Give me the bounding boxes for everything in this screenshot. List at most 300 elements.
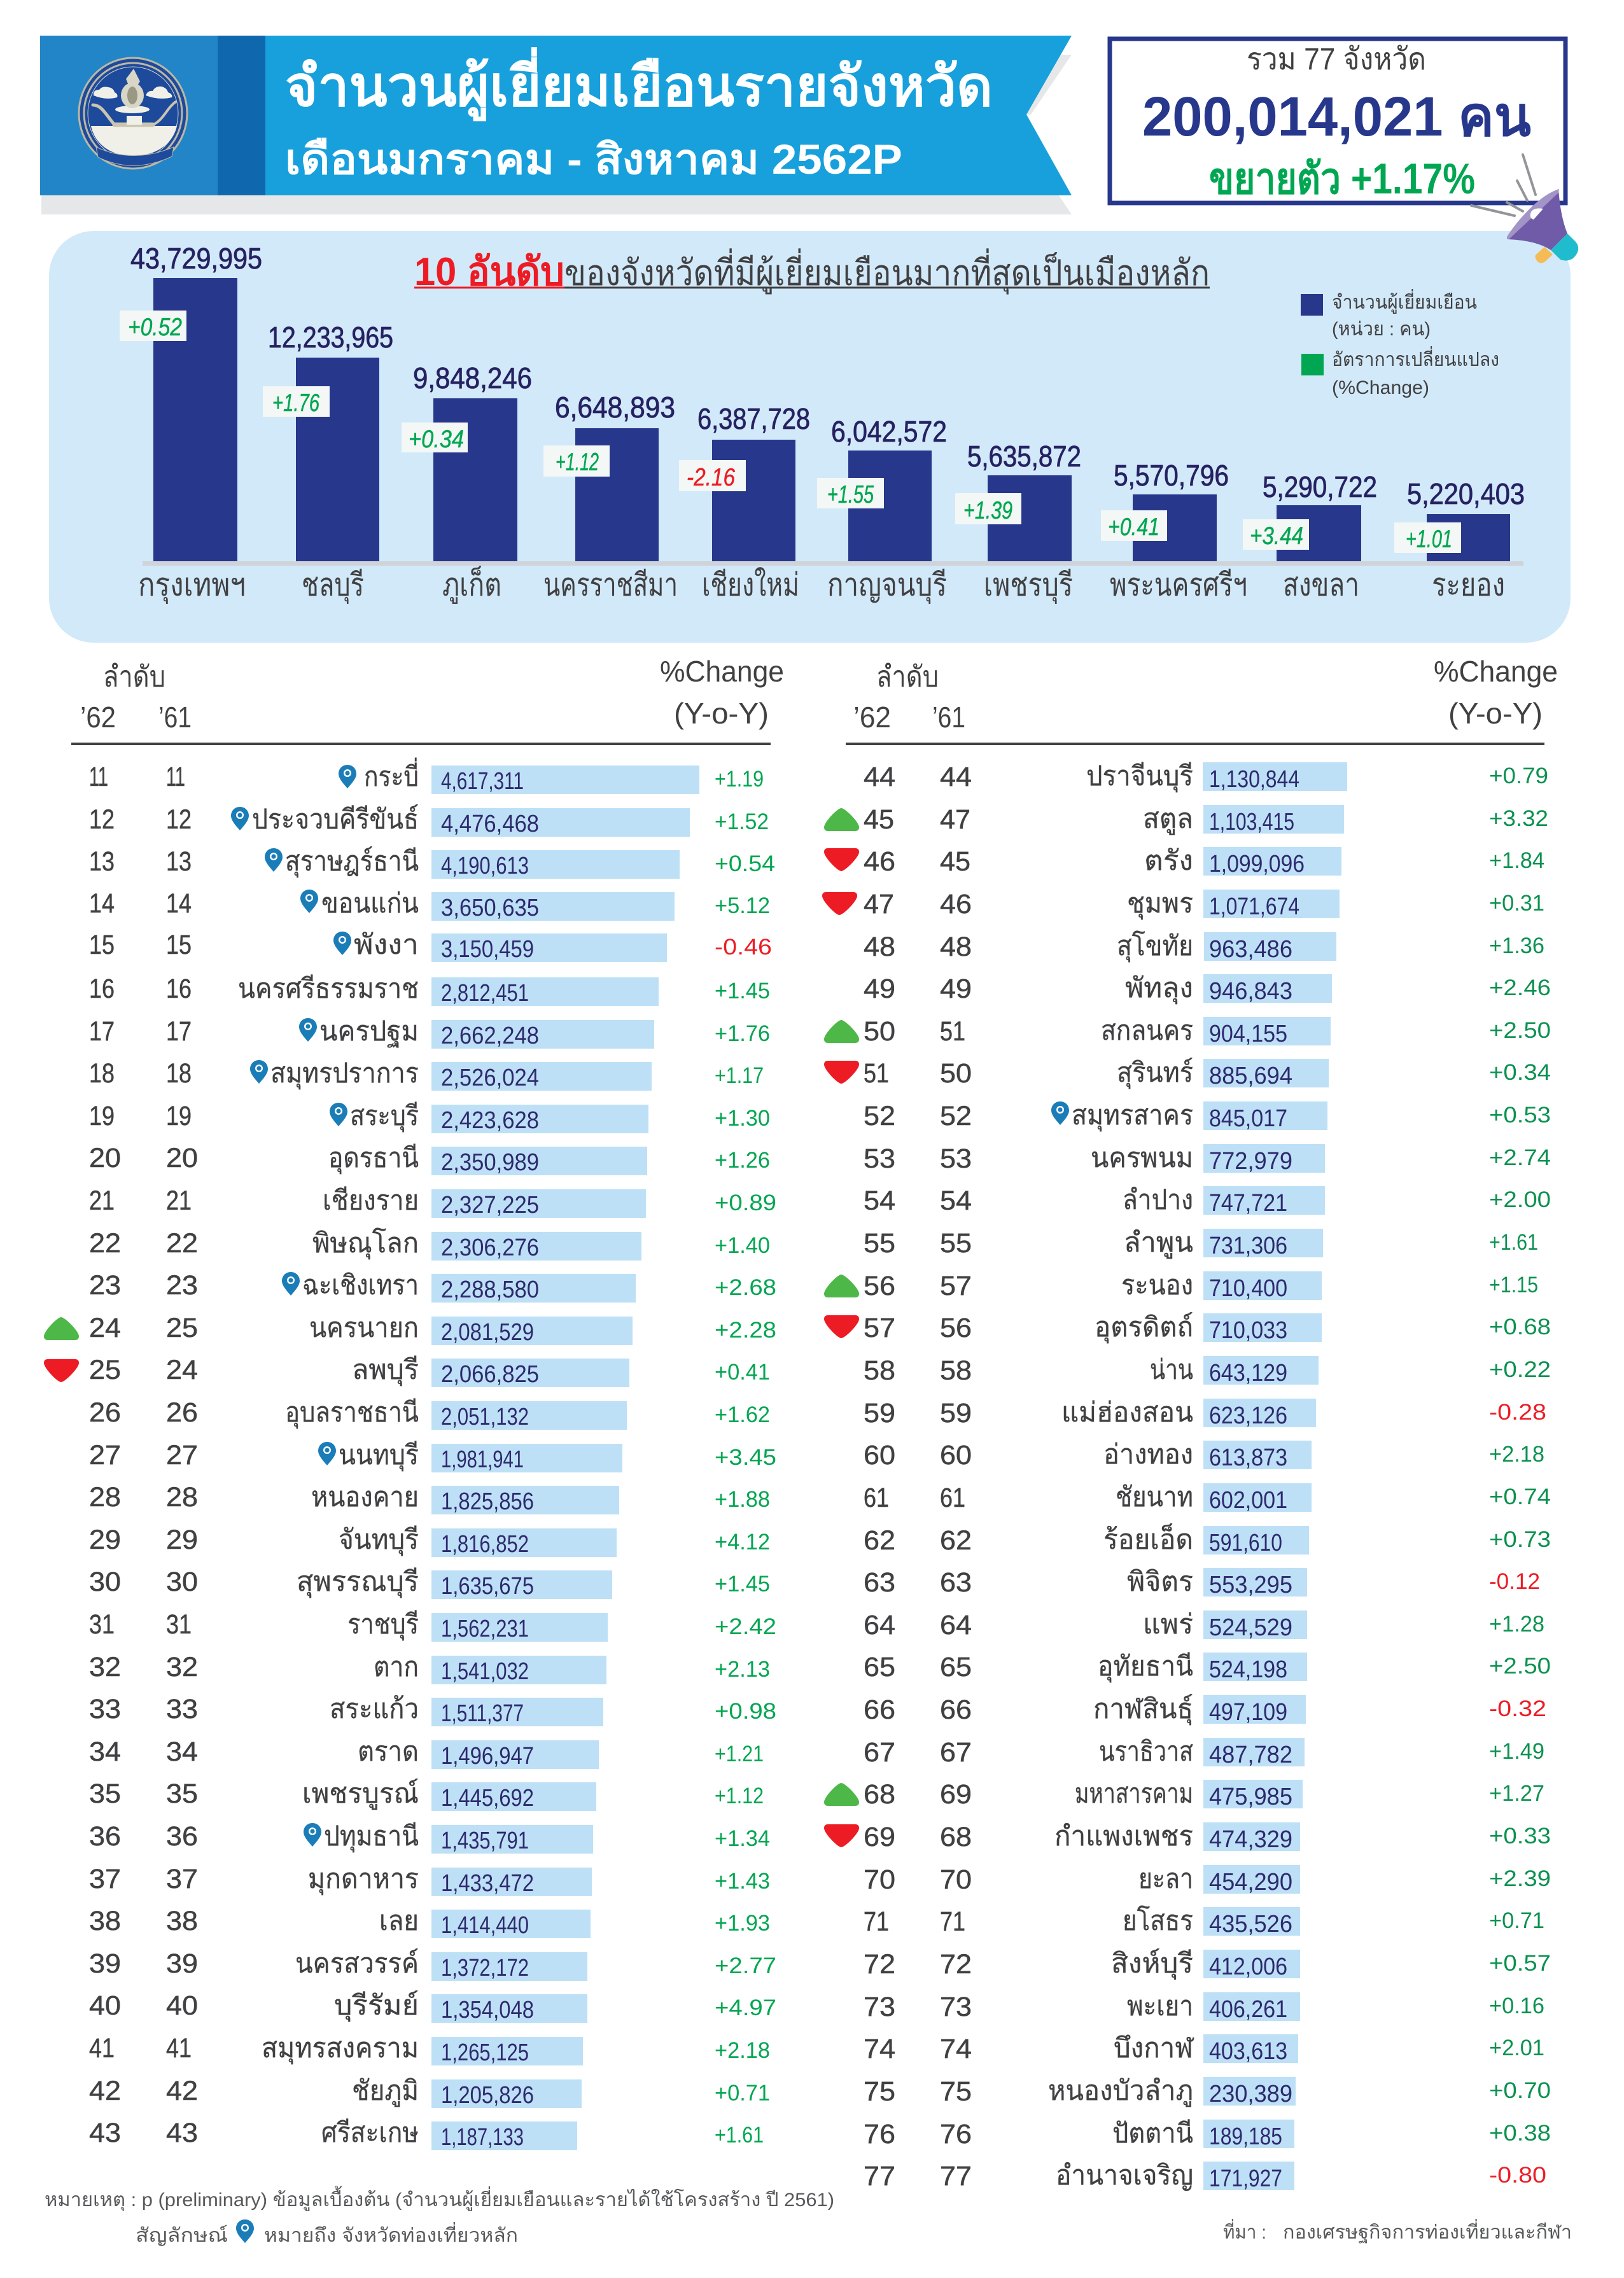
row 17: +1.76 (715, 1021, 770, 1046)
row 58 (864, 1355, 1551, 1387)
row 29: 29 (89, 1525, 121, 1555)
row 22 (89, 1227, 770, 1261)
row 49: พัทลุง (1125, 973, 1193, 1005)
total callout box: 200,014,021 คน (1142, 86, 1531, 148)
row 74: 403,613 (1209, 2038, 1287, 2065)
row 73: พะเยา (1127, 1991, 1193, 2022)
row 34: 1,496,947 (441, 1743, 534, 1770)
row 51: สุรินทร์ (1117, 1058, 1193, 1089)
row 68: 69 (940, 1779, 972, 1810)
row 50: 51 (940, 1016, 965, 1047)
row 72: 412,006 (1209, 1953, 1287, 1980)
row 68: +1.27 (1489, 1781, 1544, 1806)
row 54 (864, 1185, 1551, 1217)
row 77: -0.80 (1489, 2163, 1546, 2188)
row 43 (89, 2118, 764, 2151)
row 59: -0.28 (1489, 1400, 1546, 1425)
row 17: 2,662,248 (441, 1023, 539, 1049)
row 41: 41 (166, 2033, 192, 2064)
bar: เชียงใหม่: 6,387,728 (697, 402, 810, 435)
row 62: ร้อยเอ็ด (1103, 1523, 1193, 1555)
chart legend (1301, 289, 1499, 398)
row 37: +1.43 (715, 1869, 770, 1894)
row 25: ลพบุรี (352, 1355, 419, 1387)
row 19: สระบุรี (350, 1101, 419, 1133)
source: กองเศรษฐกิจการท่องเที่ยวและกีฬา (1283, 2219, 1572, 2244)
row 27: 1,981,941 (441, 1446, 524, 1473)
chart legend: (หน่วย : คน) (1332, 319, 1431, 340)
row 54: 54 (940, 1185, 972, 1216)
row 75: หนองบัวลำภู (1048, 2076, 1193, 2107)
row 69: 68 (940, 1822, 972, 1852)
row 11: 4,617,311 (441, 768, 524, 795)
bar: เชียงใหม่: เชียงใหม่ (702, 567, 799, 603)
row 71: +0.71 (1489, 1908, 1544, 1933)
row 11: +1.19 (715, 767, 764, 792)
row 63: -0.12 (1489, 1569, 1540, 1594)
row 29: จันทบุรี (339, 1525, 419, 1556)
row 57: 57 (864, 1313, 895, 1343)
row 12: 12 (166, 804, 192, 835)
row 43: 43 (89, 2118, 121, 2148)
bar: ชลบุรี: 12,233,965 (268, 321, 393, 354)
row 68: มหาสารคาม (1075, 1778, 1193, 1809)
bar: พระนครศรีฯ: +0.41 (1108, 514, 1159, 541)
bar: ภูเก็ต: ภูเก็ต (442, 566, 501, 604)
row 27 (89, 1440, 776, 1473)
row 50: 50 (864, 1016, 895, 1047)
table header right: (Y-o-Y) (1448, 697, 1543, 730)
row 21: +0.89 (715, 1191, 776, 1215)
row 13: 4,190,613 (441, 853, 529, 879)
row 14: 3,650,635 (441, 895, 539, 921)
row 48: 963,486 (1209, 936, 1292, 963)
total callout box: รวม 77 จังหวัด (1247, 43, 1426, 76)
row 74 (864, 2033, 1544, 2065)
row 16: 16 (166, 974, 192, 1004)
row 61: 602,001 (1209, 1487, 1287, 1514)
table header right: %Change (1434, 655, 1558, 688)
row 21 (89, 1185, 776, 1219)
row 72: 72 (940, 1949, 972, 1980)
row 60: 60 (864, 1440, 895, 1471)
row 31 (89, 1609, 776, 1642)
row 73 (864, 1991, 1544, 2023)
row 45: 47 (940, 804, 970, 835)
row 53: 53 (940, 1143, 972, 1174)
row 28: หนองคาย (311, 1482, 419, 1513)
row 54: 54 (864, 1185, 895, 1216)
row 34: 34 (89, 1736, 121, 1767)
row 43: 1,187,133 (441, 2124, 524, 2151)
row 24: 24 (89, 1313, 121, 1343)
row 64: 524,529 (1209, 1614, 1292, 1641)
row 42: 42 (166, 2076, 198, 2106)
symbol legend: หมายถึง จังหวัดท่องเที่ยวหลัก (264, 2222, 518, 2246)
row 11: กระบี่ (364, 758, 419, 792)
row 64 (864, 1609, 1544, 1641)
row 77 (864, 2160, 1546, 2192)
row 17: นครปฐม (319, 1016, 419, 1047)
row 58: น่าน (1150, 1355, 1193, 1385)
row 15: -0.46 (715, 935, 772, 960)
row 52: 52 (864, 1101, 895, 1131)
row 15: 15 (89, 930, 115, 960)
row 23: ฉะเชิงเทรา (302, 1270, 419, 1301)
row 33: 33 (166, 1694, 198, 1724)
table header left (71, 655, 784, 745)
row 31: 31 (89, 1609, 115, 1640)
row 26: อุบลราชธานี (285, 1397, 419, 1429)
row 30: สุพรรณบุรี (297, 1567, 419, 1598)
row 45: 45 (864, 804, 894, 835)
row 44: +0.79 (1489, 764, 1548, 788)
row 31: +2.42 (715, 1614, 776, 1639)
row 32 (89, 1652, 770, 1685)
row 58: 58 (864, 1355, 895, 1386)
row 37 (89, 1864, 770, 1897)
row 34: ตราด (358, 1736, 419, 1767)
table left: ranks 11-43 (44, 758, 776, 2151)
row 62 (864, 1523, 1551, 1556)
row 30: +1.45 (715, 1572, 770, 1597)
row 45: 1,103,415 (1209, 809, 1294, 835)
row 28: 28 (89, 1482, 121, 1513)
row 63: พิจิตร (1127, 1567, 1193, 1597)
row 63 (864, 1567, 1540, 1598)
bar: กรุงเทพฯ: 43,729,995 (130, 242, 262, 275)
row 69 (824, 1821, 1551, 1853)
row 75: 230,389 (1209, 2081, 1292, 2107)
row 43: 43 (166, 2118, 198, 2148)
bar: สงขลา: +3.44 (1250, 522, 1303, 550)
row 38: 38 (166, 1906, 198, 1936)
table header right: ’61 (932, 701, 965, 734)
total callout box: ขยายตัว +1.17% (1209, 155, 1475, 203)
row 18: 2,526,024 (441, 1065, 539, 1091)
row 66: 66 (940, 1695, 972, 1725)
row 11: 11 (89, 762, 108, 792)
row 77: 77 (940, 2161, 972, 2191)
row 65: อุทัยธานี (1098, 1651, 1193, 1683)
row 54: 747,721 (1209, 1190, 1287, 1217)
row 41: +2.18 (715, 2038, 770, 2063)
row 35: +1.12 (715, 1784, 764, 1808)
panel heading: 10 อันดับ (414, 250, 564, 294)
bar: กรุงเทพฯ: กรุงเทพฯ (138, 567, 246, 604)
row 49: 946,843 (1209, 978, 1292, 1005)
row 40: 1,354,048 (441, 1997, 534, 2023)
row 77: 77 (864, 2161, 895, 2191)
panel heading: ของจังหวัดที่มีผู้เยี่ยมเยือนมากที่สุดเป็นเมืองหลัก (564, 248, 1210, 295)
row 13: 13 (89, 846, 115, 877)
row 52: +0.53 (1489, 1103, 1551, 1128)
bar: สงขลา (1243, 470, 1377, 603)
row 33: 33 (89, 1694, 121, 1724)
row 67: 67 (940, 1737, 972, 1768)
row 39: +2.77 (715, 1953, 776, 1978)
row 60: 613,873 (1209, 1444, 1287, 1471)
row 64: 64 (864, 1610, 895, 1640)
row 57: 56 (940, 1313, 972, 1343)
row 72 (864, 1948, 1551, 1980)
row 46: 1,099,096 (1209, 851, 1305, 877)
row 32: ตาก (374, 1652, 419, 1682)
row 46: 45 (940, 846, 970, 877)
row 23: 23 (166, 1270, 198, 1301)
row 40: 40 (89, 1990, 121, 2021)
bar: พระนครศรีฯ: พระนครศรีฯ (1110, 567, 1247, 603)
row 19: 19 (166, 1101, 192, 1131)
row 30 (89, 1567, 770, 1600)
bar: ชลบุรี: ชลบุรี (302, 567, 364, 604)
icon: ministry seal logo (79, 58, 187, 169)
table header right (846, 655, 1558, 745)
row 28: +1.88 (715, 1487, 770, 1512)
row 16: 2,812,451 (441, 980, 529, 1007)
row 26 (89, 1397, 770, 1430)
row 65: 524,198 (1209, 1656, 1287, 1683)
bar: เชียงใหม่ (679, 402, 810, 603)
row 36: 1,435,791 (441, 1827, 529, 1854)
row 48: 48 (864, 932, 895, 962)
row 57: 710,033 (1209, 1317, 1287, 1344)
row 13 (89, 846, 775, 879)
row 76: ปัตตานี (1112, 2118, 1193, 2149)
row 38: เลย (379, 1906, 419, 1936)
bar: เพชรบุรี: +1.39 (963, 497, 1012, 524)
row 22: พิษณุโลก (312, 1227, 419, 1260)
row 55: 55 (864, 1228, 895, 1259)
row 28: 28 (166, 1482, 198, 1513)
row 37: 37 (89, 1864, 121, 1894)
row 21: 21 (166, 1185, 192, 1216)
row 63: 63 (940, 1567, 972, 1598)
row 35: 35 (89, 1778, 121, 1809)
row 18: 18 (89, 1058, 115, 1089)
row 31: ราชบุรี (347, 1609, 419, 1641)
row 69: +0.33 (1489, 1824, 1551, 1848)
bar: นครราชสีมา: +1.12 (556, 449, 599, 476)
row 27: นนทบุรี (339, 1440, 419, 1472)
row 55: ลำพูน (1124, 1227, 1193, 1259)
row 58: 58 (940, 1355, 972, 1386)
bar chart: top 10 provinces (120, 242, 1525, 604)
bar: เพชรบุรี: เพชรบุรี (984, 567, 1073, 604)
row 29: 29 (166, 1525, 198, 1555)
row 76: +0.38 (1489, 2121, 1551, 2146)
row 21: 21 (89, 1185, 115, 1216)
row 64: +1.28 (1489, 1612, 1544, 1637)
row 72: 72 (864, 1949, 895, 1980)
row 35: เพชรบูรณ์ (302, 1778, 419, 1810)
row 62: +0.73 (1489, 1527, 1551, 1552)
row 11 (89, 758, 764, 795)
row 27: +3.45 (715, 1445, 776, 1470)
row 38: 1,414,440 (441, 1912, 529, 1939)
row 14 (89, 888, 770, 921)
row 32: 32 (89, 1652, 121, 1682)
row 62: 62 (864, 1525, 895, 1556)
table header left: %Change (660, 655, 784, 688)
row 42 (89, 2076, 770, 2109)
row 49 (864, 973, 1551, 1005)
bar: พระนครศรีฯ (1101, 459, 1247, 603)
row 72: +0.57 (1489, 1951, 1551, 1976)
row 38: +1.93 (715, 1911, 770, 1936)
row 53: 772,979 (1209, 1148, 1292, 1175)
row 57: +0.68 (1489, 1315, 1551, 1339)
row 67: +1.49 (1489, 1739, 1544, 1764)
bar: ภูเก็ต: +0.34 (409, 426, 464, 453)
row 56: 56 (864, 1271, 895, 1301)
row 23 (89, 1270, 776, 1303)
row 73: 73 (864, 1992, 895, 2022)
row 24: 2,081,529 (441, 1319, 534, 1346)
row 64: 64 (940, 1610, 972, 1640)
row 66: กาฬสินธุ์ (1093, 1694, 1193, 1726)
row 39: 39 (89, 1948, 121, 1979)
row 56: ระนอง (1121, 1270, 1193, 1301)
row 13: +0.54 (715, 851, 775, 876)
row 57 (824, 1312, 1551, 1344)
row 52: สมุทรสาคร (1072, 1100, 1193, 1132)
row 61 (864, 1482, 1551, 1514)
row 61: ชัยนาท (1116, 1482, 1193, 1513)
icon: megaphone (1471, 155, 1578, 263)
symbol legend: สัญลักษณ์ (136, 2225, 228, 2246)
row 35: 35 (166, 1778, 198, 1809)
row 13: 13 (166, 846, 192, 877)
row 59: 59 (940, 1398, 972, 1429)
row 17 (89, 1016, 770, 1049)
row 51: +0.34 (1489, 1060, 1551, 1085)
row 69: กำแพงเพชร (1054, 1821, 1193, 1852)
row 52: 845,017 (1209, 1105, 1287, 1132)
row 25: 24 (166, 1355, 198, 1385)
row 24: 25 (166, 1313, 198, 1343)
row 47: +0.31 (1489, 891, 1544, 916)
row 42: ชัยภูมิ (352, 2076, 419, 2107)
row 46 (824, 846, 1544, 877)
row 71: 435,526 (1209, 1911, 1292, 1938)
row 44: ปราจีนบุรี (1086, 761, 1193, 793)
row 74: 74 (940, 2034, 972, 2064)
row 36: +1.34 (715, 1826, 770, 1851)
row 47: ชุมพร (1127, 888, 1193, 920)
bar: กรุงเทพฯ: +0.52 (128, 314, 182, 341)
row 75: +0.70 (1489, 2078, 1551, 2103)
row 51: 51 (864, 1058, 889, 1089)
row 62: 62 (940, 1525, 972, 1556)
row 45: +3.32 (1489, 806, 1548, 831)
row 14: 14 (89, 888, 115, 919)
row 63: 553,295 (1209, 1572, 1292, 1598)
row 73: 406,261 (1209, 1996, 1287, 2023)
row 40: บุรีรัมย์ (334, 1990, 419, 2022)
row 48: 48 (940, 932, 972, 962)
row 38: 38 (89, 1906, 121, 1936)
row 15: 15 (166, 930, 192, 960)
row 76: 76 (940, 2119, 972, 2149)
row 18 (89, 1058, 764, 1091)
row 36: 36 (166, 1821, 198, 1852)
bar: เพชรบุรี: 5,635,872 (967, 440, 1081, 473)
panel heading (414, 248, 1210, 295)
bar: นครราชสีมา (543, 391, 678, 603)
row 13: สุราษฎร์ธานี (285, 846, 419, 878)
row 41: 41 (89, 2033, 115, 2064)
row 73: 73 (940, 1992, 972, 2022)
row 67: 67 (864, 1737, 895, 1768)
row 41 (89, 2033, 770, 2066)
row 19: +1.30 (715, 1106, 770, 1131)
row 33: +0.98 (715, 1699, 776, 1724)
row 44: 44 (940, 762, 972, 792)
row 37: 37 (166, 1864, 198, 1894)
row 67: 487,782 (1209, 1742, 1292, 1768)
row 25: 25 (89, 1355, 121, 1385)
row 41: 1,265,125 (441, 2039, 529, 2066)
row 70: 70 (864, 1864, 895, 1895)
row 15: 3,150,459 (441, 936, 534, 963)
row 49: +2.46 (1489, 975, 1551, 1000)
row 14: 14 (166, 888, 192, 919)
row 56: 710,400 (1209, 1275, 1287, 1302)
footnote: หมายเหตุ : p (preliminary) ข้อมูลเบื้องต้น (จำนวนผู้เยี่ยมเยือนและรายได้ใช้โครงสร้าง ปี 2561) (45, 2186, 834, 2212)
row 45 (824, 804, 1548, 835)
row 23: 23 (89, 1270, 121, 1301)
row 47: 1,071,674 (1209, 893, 1299, 920)
row 30: 30 (166, 1567, 198, 1597)
bar: นครราชสีมา: นครราชสีมา (543, 567, 678, 603)
row 29 (89, 1525, 770, 1558)
row 35 (89, 1778, 764, 1812)
row 34: +1.21 (715, 1742, 764, 1766)
row 34: 34 (166, 1736, 198, 1767)
row 22: 22 (89, 1228, 121, 1259)
row 50: +2.50 (1489, 1018, 1551, 1043)
row 38 (89, 1906, 770, 1939)
row 20: 2,350,989 (441, 1149, 539, 1176)
row 71: 71 (864, 1906, 889, 1937)
row 26: 26 (166, 1397, 198, 1428)
row 55: 55 (940, 1228, 972, 1259)
row 65: 65 (864, 1652, 895, 1682)
row 42: 1,205,826 (441, 2082, 534, 2109)
row 20: 20 (89, 1143, 121, 1173)
row 66: -0.32 (1489, 1696, 1546, 1721)
title line 2: เดือนมกราคม - สิงหาคม 2562P (285, 136, 902, 183)
row 44 (864, 761, 1548, 793)
row 43: ศรีสะเกษ (321, 2118, 419, 2148)
row 73: +0.16 (1489, 1994, 1544, 2018)
bar: กาญจนบุรี: กาญจนบุรี (827, 567, 947, 604)
row 30: 30 (89, 1567, 121, 1597)
row 54: ลำปาง (1123, 1185, 1193, 1215)
source: ที่มา : (1223, 2219, 1266, 2243)
row 24: +2.28 (715, 1318, 776, 1343)
row 22: 22 (166, 1228, 198, 1259)
row 70: 70 (940, 1864, 972, 1895)
row 62: 591,610 (1209, 1530, 1282, 1556)
bar: ระยอง: ระยอง (1432, 567, 1505, 603)
row 30: 1,635,675 (441, 1573, 534, 1600)
row 61: 61 (864, 1483, 889, 1513)
bar: ระยอง (1394, 477, 1525, 603)
row 31: 31 (166, 1609, 192, 1640)
row 15 (89, 930, 772, 963)
